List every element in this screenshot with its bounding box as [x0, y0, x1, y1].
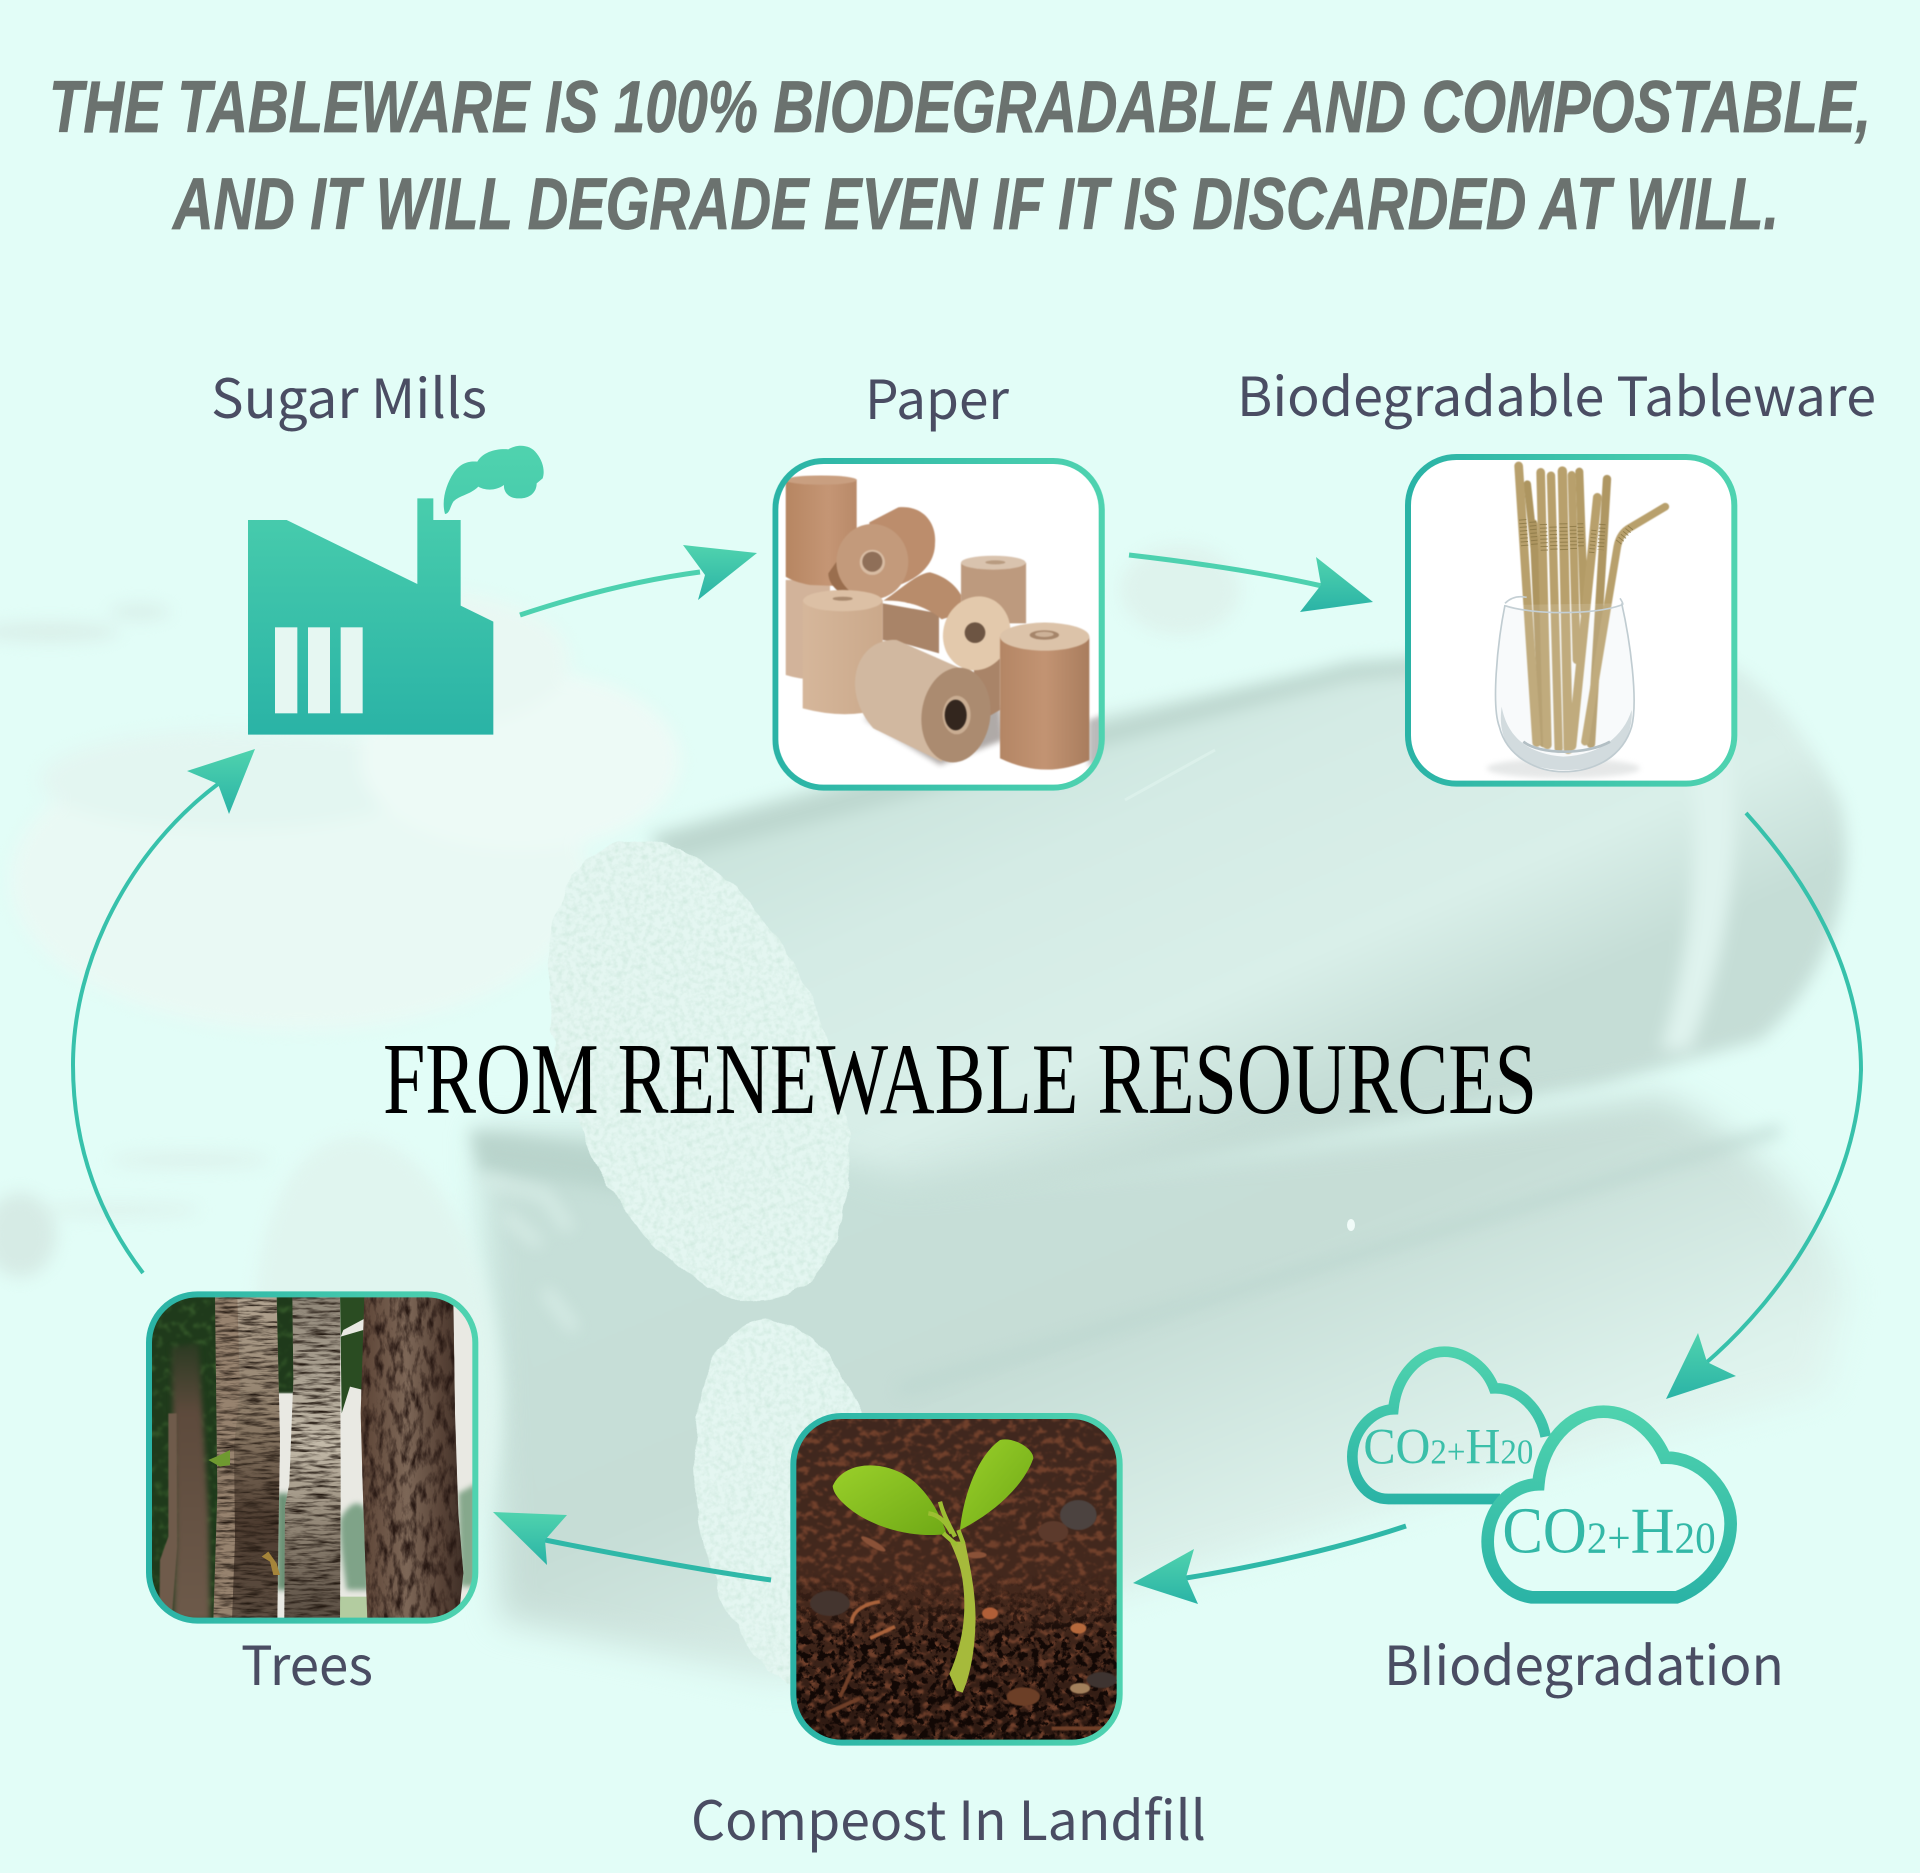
title — [49, 67, 1871, 245]
label: Paper: Paper — [865, 356, 1010, 435]
label: Sugar Mills: Sugar Mills — [211, 355, 487, 434]
photo: seedling in soil — [790, 1413, 1123, 1747]
photo: kraft paper rolls — [770, 457, 1107, 793]
photo: straws in glass — [1403, 453, 1740, 790]
arrow: trees to sugar mills — [73, 749, 255, 1273]
icon: factory with smoke — [248, 446, 544, 735]
frame — [149, 1294, 475, 1621]
arrow: paper to tableware — [1129, 555, 1373, 612]
label: Trees: Trees — [241, 1622, 373, 1701]
frame — [1408, 457, 1734, 784]
photo: tree trunks — [143, 1290, 480, 1627]
frame — [793, 1416, 1120, 1743]
arrow: biodegradation to compost — [1133, 1526, 1406, 1604]
label: Biodegradation: BIiodegradation — [1384, 1622, 1784, 1701]
arrow: sugar mills to paper — [520, 545, 757, 615]
panel: trees — [143, 1290, 480, 1627]
icon: CO2 and H2O clouds: CO2+H20 — [1502, 1495, 1716, 1568]
panel: soil with seedling — [790, 1413, 1123, 1747]
panel: paper rolls — [770, 457, 1107, 793]
arrow: compost to trees — [493, 1512, 771, 1580]
central heading: FROM RENEWABLE RESOURCES — [383, 1023, 1537, 1136]
icon: CO2 and H2O clouds — [1352, 1352, 1731, 1597]
panel: biodegradable straws in glass — [1403, 453, 1740, 790]
icon: CO2 and H2O clouds: CO2+H20 — [1363, 1418, 1533, 1474]
label: Compost in landfill: Compeost In Landfill — [691, 1777, 1206, 1856]
frame — [775, 461, 1102, 788]
label: Biodegradable Tableware: Biodegradable Tableware — [1237, 353, 1876, 432]
arrow: tableware to biodegradation — [1666, 813, 1861, 1399]
